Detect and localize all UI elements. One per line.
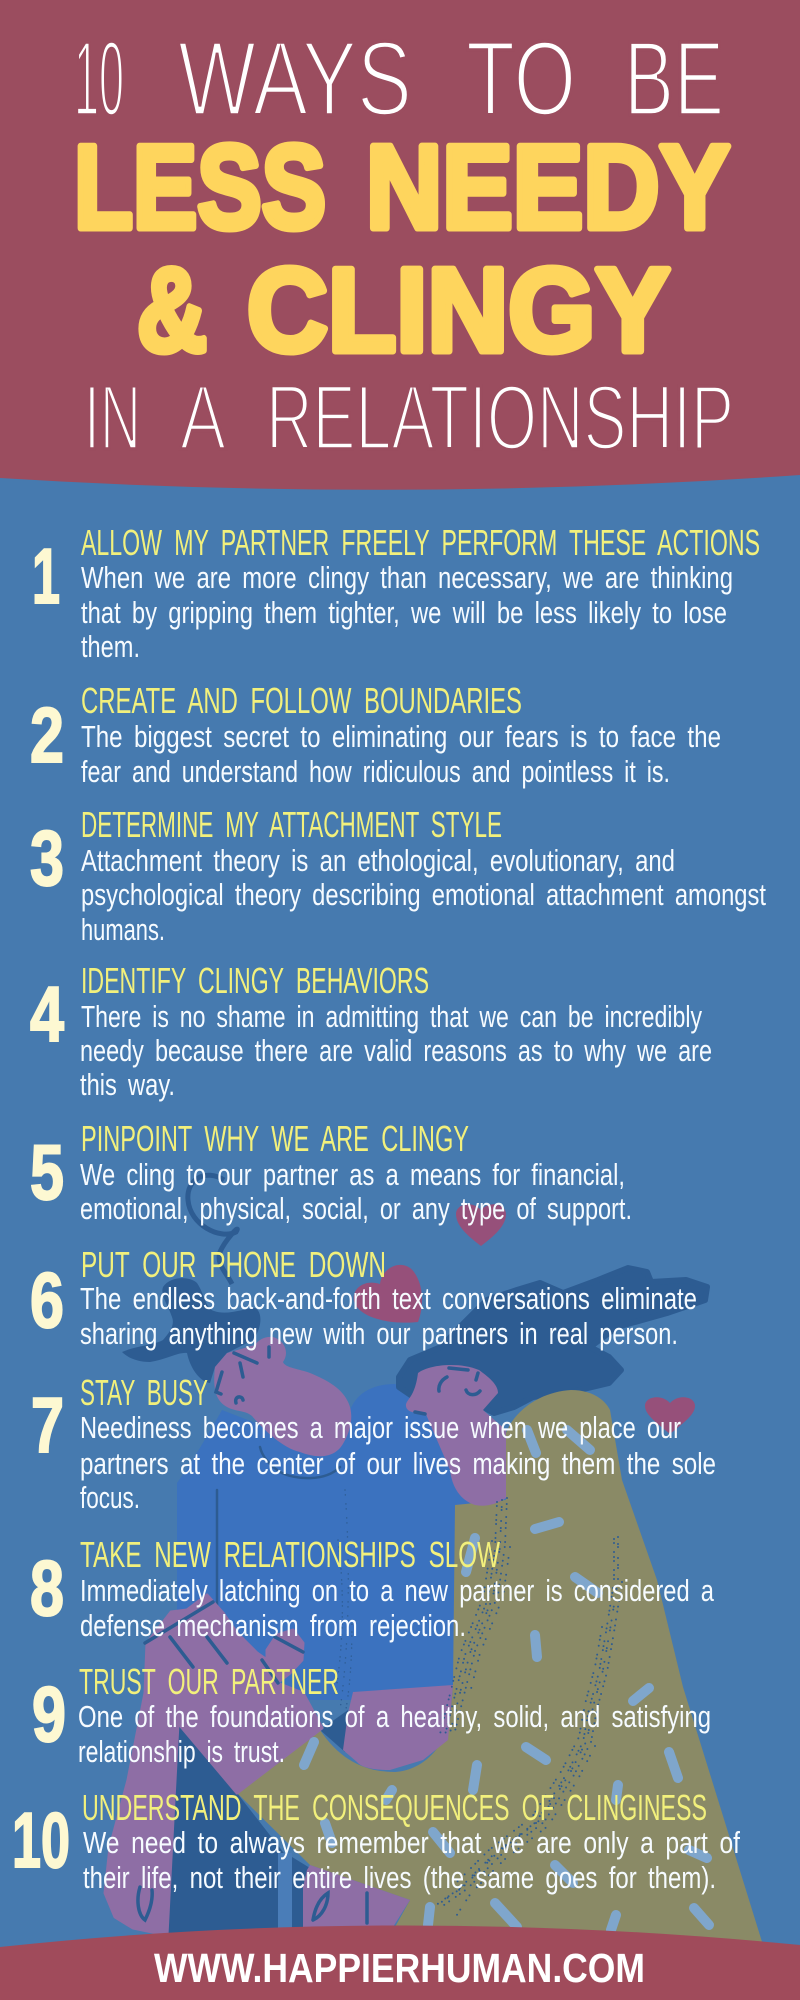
man's arm and fist — [105, 1595, 322, 1935]
body 10 — [83, 1825, 740, 1895]
number 9: 9 — [32, 1670, 66, 1758]
woman's hair — [399, 1268, 707, 1413]
title line 3: CLINGY — [247, 244, 670, 377]
body 3: humans. — [81, 912, 165, 947]
heart top — [456, 1204, 506, 1246]
man's face lines — [216, 1347, 340, 1610]
second trouser strip — [292, 1857, 310, 1935]
title line 4 — [84, 367, 734, 469]
heart right — [645, 1397, 695, 1434]
body 3 — [81, 843, 766, 947]
number 5: 5 — [30, 1128, 64, 1216]
hand detail lines — [138, 1602, 367, 1923]
body 9: relationship is trust. — [78, 1734, 285, 1769]
body 7 — [80, 1410, 716, 1515]
body 1 — [81, 560, 733, 664]
man's hair curl — [188, 1175, 237, 1284]
heading 2: CREATE AND FOLLOW BOUNDARIES — [81, 680, 522, 721]
man's head — [214, 1337, 351, 1456]
heading 4: IDENTIFY CLINGY BEHAVIORS — [81, 960, 429, 1001]
number 7: 7 — [31, 1381, 64, 1469]
number 6: 6 — [30, 1256, 64, 1344]
title line 2 — [74, 121, 730, 254]
man's dark trousers — [167, 1723, 287, 1935]
body 5: We cling to our partner as a means for financial, — [80, 1157, 625, 1192]
item 8 — [30, 1534, 715, 1643]
title line 4: IN — [84, 367, 141, 469]
number 3: 3 — [30, 814, 64, 902]
number 8: 8 — [30, 1544, 64, 1632]
body 7: focus. — [80, 1480, 140, 1515]
item 1 — [32, 522, 760, 664]
number 10: 10 — [12, 1796, 70, 1884]
number 1: 1 — [32, 532, 60, 620]
heart middle — [354, 1265, 422, 1323]
title line 1 — [74, 20, 724, 138]
woman's face lines — [415, 1368, 480, 1414]
light strip — [278, 1853, 292, 1935]
body 9 — [78, 1699, 711, 1769]
title line 3: & — [137, 244, 207, 377]
item 6 — [30, 1244, 697, 1351]
body 5 — [80, 1157, 632, 1226]
dark triangle — [320, 1710, 348, 1752]
header band — [0, 0, 800, 490]
heading 7: STAY BUSY — [80, 1372, 208, 1413]
woman's dress — [237, 1390, 763, 1945]
title line 1: BE — [624, 20, 724, 138]
sleeve — [343, 1685, 453, 1770]
item 5 — [30, 1118, 632, 1226]
woman's face and neck — [406, 1365, 506, 1506]
heading 5: PINPOINT WHY WE ARE CLINGY — [81, 1118, 469, 1159]
heading 6: PUT OUR PHONE DOWN — [81, 1244, 386, 1285]
number 4: 4 — [30, 970, 64, 1058]
item 2 — [30, 680, 721, 789]
footer band — [0, 1925, 800, 2000]
dress dashes — [304, 1430, 709, 1930]
body 8: defense mechanism from rejection. — [80, 1608, 466, 1643]
body 1: them. — [81, 629, 140, 664]
item 3 — [30, 804, 766, 947]
item 10 — [12, 1787, 740, 1895]
body 6 — [80, 1281, 697, 1351]
number 2: 2 — [30, 691, 64, 779]
website url: WWW.HAPPIERHUMAN.COM — [154, 1945, 645, 1991]
title line 2: NEEDY — [366, 121, 730, 254]
title line 2: LESS — [74, 121, 326, 254]
item 7 — [31, 1372, 716, 1515]
heading 9: TRUST OUR PARTNER — [79, 1661, 339, 1702]
body 4: this way. — [80, 1067, 175, 1102]
title line 1: 10 — [74, 20, 124, 138]
stipple texture — [334, 1490, 622, 1921]
item 4 — [30, 960, 712, 1102]
body 4 — [80, 999, 712, 1102]
title line 1: WAYS — [178, 20, 412, 138]
lower hand — [303, 1865, 410, 1935]
illustration: embracing couple — [105, 1175, 763, 1945]
title line 4: A — [180, 367, 226, 469]
body 8 — [80, 1573, 715, 1643]
item 9 — [32, 1661, 711, 1769]
man's blue shirt — [177, 1384, 470, 1700]
title line 1: TO — [466, 20, 576, 138]
body 2 — [81, 719, 721, 789]
heading 3: DETERMINE MY ATTACHMENT STYLE — [81, 804, 502, 845]
heading 8: TAKE NEW RELATIONSHIPS SLOW — [80, 1534, 500, 1575]
man's hair — [122, 1278, 260, 1383]
body 5: emotional, physical, social, or any type of support. — [80, 1191, 632, 1226]
